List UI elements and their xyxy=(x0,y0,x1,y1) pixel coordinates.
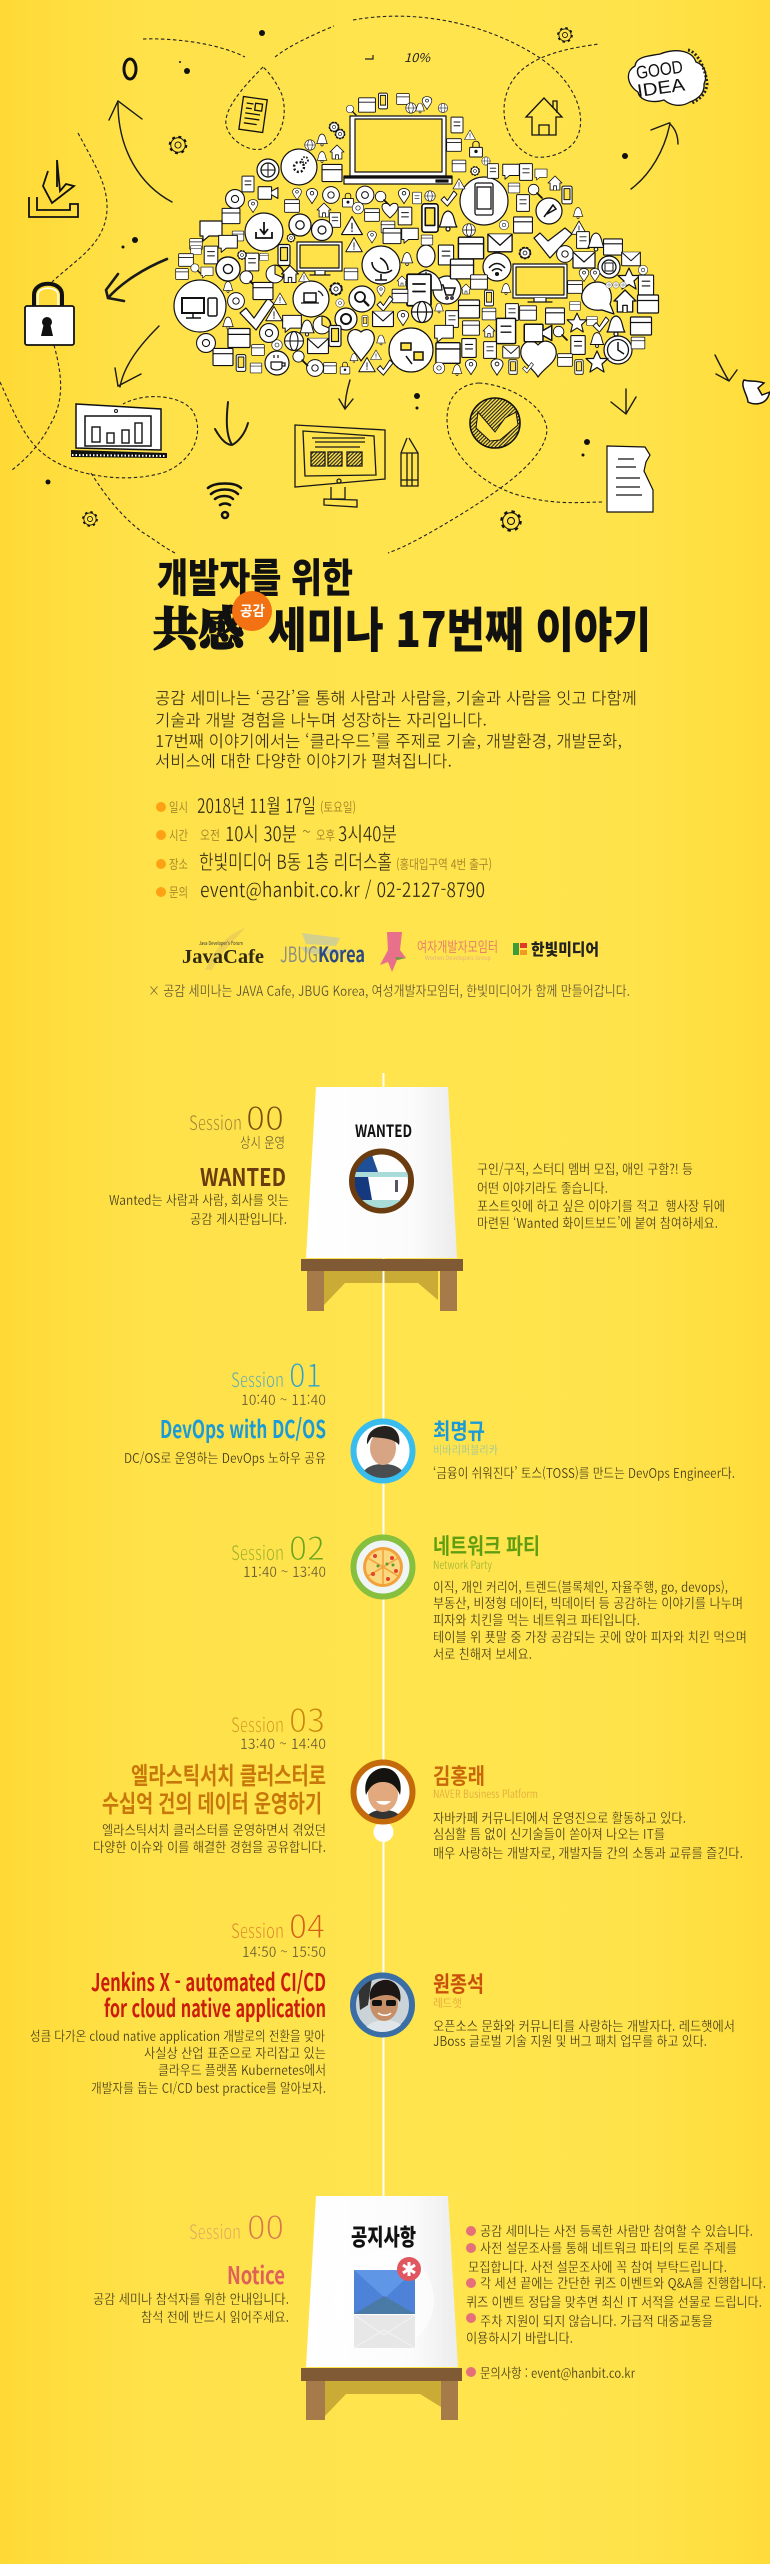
session 01 (left) xyxy=(124,1351,326,1467)
brush calligraphy: 共感 xyxy=(153,593,248,659)
easel shadows xyxy=(324,1271,441,2416)
logo: JavaCafe: Java Developer's Forum xyxy=(199,940,243,947)
network party text: 이직, 개인 커리어, 트렌드(블록체인, 자율주행, go, devops), xyxy=(433,1576,728,1596)
session 03 (left): 수십억 건의 데이터 운영하기 xyxy=(102,1784,322,1819)
timeline line xyxy=(374,1073,394,2198)
intro paragraph xyxy=(155,685,637,772)
speaker: 최명규 xyxy=(433,1414,735,1482)
session 04 (left): 04 xyxy=(289,1902,325,1948)
event info list: 3시40분 xyxy=(338,818,397,847)
icon: wifi xyxy=(208,484,241,518)
monitor center xyxy=(297,242,342,275)
session 00: wanted (right text): 포스트잇에 하고 싶은 이야기를 적고 행사장 뒤에 xyxy=(477,1195,725,1215)
event info list: event@hanbit.co.kr / 02-2127-8790 xyxy=(200,874,485,903)
session 03 (left): 13:40 ~ 14:40 xyxy=(240,1733,326,1754)
session 00: wanted (left): 00 xyxy=(246,1094,284,1140)
event info list: 문의 xyxy=(169,882,188,901)
speaker: 김홍래: 매우 사랑하는 개발자로, 개발자들 간의 소통과 교류를 즐긴다. xyxy=(433,1842,743,1862)
speaker photo: 최명규 xyxy=(354,1422,412,1480)
icon: house doodle xyxy=(526,98,562,135)
wanted sign title: WANTED xyxy=(355,1117,412,1142)
network party text xyxy=(433,1529,747,1663)
logo: JavaCafe xyxy=(182,928,264,970)
event info list: 오전 xyxy=(200,825,220,844)
event info list: ~ xyxy=(302,816,311,845)
icon: wrench xyxy=(743,380,770,404)
title: 세미나 17번째 이야기 xyxy=(268,591,651,661)
badge: 공감 xyxy=(240,601,265,621)
easel: notice xyxy=(301,2196,462,2420)
network party text: 피자와 치킨을 먹는 네트워크 파티입니다. xyxy=(433,1609,640,1629)
session 01 (left): DevOps with DC/OS xyxy=(160,1410,326,1445)
notice sign title: 공지사항 xyxy=(351,2218,416,2252)
network party text: 부동산, 비정형 데이터, 빅데이터 등 공감하는 이야기를 나누며 xyxy=(433,1592,743,1612)
intro paragraph: 공감 세미나는 ‘공감’을 통해 사람과 사람을, 기술과 사람을 잇고 다함께 xyxy=(155,685,637,709)
logo: JavaCafe: JavaCafe xyxy=(182,946,264,968)
session 00: wanted (right text) xyxy=(477,1158,725,1232)
icon: torn document xyxy=(607,446,653,512)
speaker: 김홍래 xyxy=(433,1759,743,1862)
logo: JBUG Korea: JBUG xyxy=(280,939,318,969)
decorative ink dots xyxy=(46,30,628,484)
session 03 (left): 다양한 이슈와 이를 해결한 경험을 공유합니다. xyxy=(93,1836,326,1856)
event info list: 10시 30분 xyxy=(225,818,297,847)
notice session (left): 참석 전에 반드시 읽어주세요. xyxy=(141,2306,289,2326)
intro paragraph: 17번째 이야기에서는 ‘클라우드’를 주제로 기술, 개발환경, 개발문화, xyxy=(155,728,622,752)
event info list: 시간 xyxy=(169,825,188,844)
dashed connector curves xyxy=(0,16,604,553)
user figure xyxy=(411,245,442,290)
notice list: 문의사항 : event@hanbit.co.kr xyxy=(480,2362,636,2382)
monitor right xyxy=(513,264,567,302)
session 00: wanted (left) xyxy=(109,1094,289,1228)
small icons xyxy=(176,93,658,376)
session 03 (left): Session xyxy=(231,1709,284,1738)
icon: ring doodle xyxy=(124,59,136,79)
session 03 (left): 03 xyxy=(289,1696,325,1742)
notice list xyxy=(466,2220,766,2382)
session 00: wanted (left): 공감 게시판입니다. xyxy=(190,1208,287,1228)
session 03 (left) xyxy=(93,1696,326,1856)
pizza icon xyxy=(354,1538,412,1596)
icon: download tray xyxy=(29,160,78,217)
speaker: 김홍래: 자바카페 커뮤니티에서 운영진으로 활동하고 있다. xyxy=(433,1807,686,1827)
icon cloud xyxy=(174,93,658,377)
partner logos xyxy=(182,928,599,972)
speaker photo: 김홍래 xyxy=(354,1762,412,1822)
notice list: 이용하시기 바랍니다. xyxy=(466,2327,573,2347)
notice list: 사전 설문조사를 통해 네트워크 파티의 토론 주제를 xyxy=(480,2237,737,2257)
event info list: 한빛미디어 B동 1층 리더스홀 xyxy=(199,846,392,875)
session 04 (left): Session xyxy=(231,1915,284,1944)
event info list: 2018년 11월 17일 xyxy=(197,790,316,819)
event info list: 장소 xyxy=(169,854,188,873)
session 04 (left): 14:50 ~ 15:50 xyxy=(242,1941,326,1962)
good idea cloud xyxy=(628,50,707,105)
icon: small document doodle xyxy=(239,96,267,133)
event info list: 일시 xyxy=(169,797,188,816)
speaker: 최명규: 최명규 xyxy=(433,1414,485,1446)
logo: women developers group: 여자개발자모임터 xyxy=(417,937,498,957)
session 02 (left): 11:40 ~ 13:40 xyxy=(243,1561,326,1582)
session 02 (left): 02 xyxy=(289,1524,325,1570)
badge xyxy=(232,591,272,631)
logo: JBUG Korea xyxy=(280,933,365,969)
speaker: 원종석: 원종석 xyxy=(433,1967,484,1999)
session 00: wanted (right text): 구인/구직, 스터디 멤버 모집, 애인 구함?! 등 xyxy=(477,1158,693,1178)
speaker: 원종석: JBoss 글로벌 기술 지원 및 버그 패치 업무를 하고 있다. xyxy=(433,2030,707,2050)
event info list xyxy=(156,790,492,903)
intro paragraph: 서비스에 대한 다양한 이야기가 펼쳐집니다. xyxy=(155,748,452,772)
speaker: 김홍래: NAVER Business Platform xyxy=(433,1786,538,1802)
session 04 (left): 성큼 다가온 cloud native application 개발로의 전환을 맞아 xyxy=(30,2025,325,2045)
speaker: 김홍래: 김홍래 xyxy=(433,1759,485,1791)
session 01 (left): 10:40 ~ 11:40 xyxy=(241,1389,326,1410)
network party text: 서로 친해져 보세요. xyxy=(433,1643,532,1663)
logo: Hanbit Media: 한빛미디어 xyxy=(531,936,599,960)
speaker: 원종석: 레드햇 xyxy=(433,1995,462,2011)
title xyxy=(153,546,651,661)
icon: gears xyxy=(83,28,572,530)
session 02 (left): Session xyxy=(231,1537,284,1566)
speaker: 김홍래: 심심할 틈 없이 신기술들이 쏟아져 나오는 IT를 xyxy=(433,1823,665,1843)
percent scribble: 10% xyxy=(404,49,431,66)
event info list: (홍대입구역 4번 출구) xyxy=(396,854,492,873)
session 04 (left): 클라우드 플랫폼 Kubernetes에서 xyxy=(158,2059,326,2079)
session 00: wanted (right text): 마련된 ‘Wanted 화이트보드’에 붙여 참여하세요. xyxy=(477,1212,718,1232)
session 01 (left): 01 xyxy=(289,1351,322,1397)
notice session (left): Session xyxy=(189,2216,241,2245)
big laptop xyxy=(344,116,452,184)
icon: pencil xyxy=(401,438,418,486)
title: 개발자를 위한 xyxy=(157,546,353,604)
session 00: wanted (left): Wanted는 사람과 사람, 회사를 잇는 xyxy=(109,1189,289,1209)
circle icon contents xyxy=(182,157,628,370)
icon: presentation monitor xyxy=(295,425,385,507)
notice session (left): 공감 세미나 참석자를 위한 안내입니다. xyxy=(93,2288,289,2308)
session 00: wanted (right text): 어떤 이야기라도 좋습니다. xyxy=(477,1177,608,1197)
logo: women developers group xyxy=(380,932,498,972)
session 04 (left): for cloud native application xyxy=(104,1989,326,2024)
intro paragraph: 기술과 개발 경험을 나누며 성장하는 자리입니다. xyxy=(155,707,487,731)
notice list: 주차 지원이 되지 않습니다. 가급적 대중교통을 xyxy=(480,2310,713,2330)
network party text: 네트워크 파티 xyxy=(433,1529,540,1561)
icon: laptop with bar chart xyxy=(71,404,167,458)
session 00: wanted (left): Session xyxy=(189,1107,242,1136)
session 03 (left): 엘라스틱서치 클러스터를 운영하면서 겪었던 xyxy=(102,1819,326,1839)
speaker: 최명규: 비바리퍼블리카 xyxy=(433,1442,498,1458)
session 04 (left): 개발자를 돕는 CI/CD best practice를 알아보자. xyxy=(91,2077,326,2097)
icon: padlock xyxy=(25,284,74,345)
logo: women developers group: Women Developers Group xyxy=(425,953,491,962)
notice list: 모집합니다. 사전 설문조사에 꼭 참여 부탁드립니다. xyxy=(468,2256,727,2276)
session 04 (left): 사실상 산업 표준으로 자리잡고 있는 xyxy=(144,2042,326,2062)
event info list: (토요일) xyxy=(320,797,356,816)
notice session (left) xyxy=(93,2203,289,2326)
good idea cloud: GOOD xyxy=(635,57,684,83)
good idea cloud: IDEA xyxy=(636,74,686,101)
session 01 (left): DC/OS로 운영하는 DevOps 노하우 공유 xyxy=(124,1447,326,1467)
wanted whiteboard picture xyxy=(352,1152,412,1212)
speaker photo: 원종석 xyxy=(353,1976,412,2034)
event info list: 오후 xyxy=(316,825,335,844)
partners note: × 공감 세미나는 JAVA Cafe, JBUG Korea, 여성개발자모임터, 한빛미디어가 함께 만들어갑니다. xyxy=(148,981,630,1001)
speaker: 원종석: 오픈소스 문화와 커뮤니티를 사랑하는 개발자다. 레드햇에서 xyxy=(433,2015,735,2035)
arrows xyxy=(106,101,737,445)
speaker: 원종석 xyxy=(433,1967,735,2050)
icon: envelope xyxy=(334,2250,434,2350)
big circles xyxy=(174,149,632,377)
easel: wanted xyxy=(301,1087,463,1311)
session 03 (left): 엘라스틱서치 클러스터로 xyxy=(131,1756,326,1791)
logo: JBUG Korea: Korea xyxy=(318,939,365,969)
notice session (left): Notice xyxy=(227,2256,285,2291)
session 04 (left): Jenkins X - automated CI/CD xyxy=(91,1963,326,1998)
session 00: wanted (left): 상시 운영 xyxy=(240,1132,285,1153)
session 01 (left): Session xyxy=(231,1364,284,1393)
session 04 (left) xyxy=(30,1902,326,2097)
session 02 (left) xyxy=(231,1524,326,1582)
network party text: Network Party xyxy=(433,1557,492,1573)
icon: hatched globe xyxy=(470,398,520,448)
notice session (left): 00 xyxy=(247,2203,284,2249)
session 00: wanted (left): WANTED xyxy=(200,1158,286,1193)
